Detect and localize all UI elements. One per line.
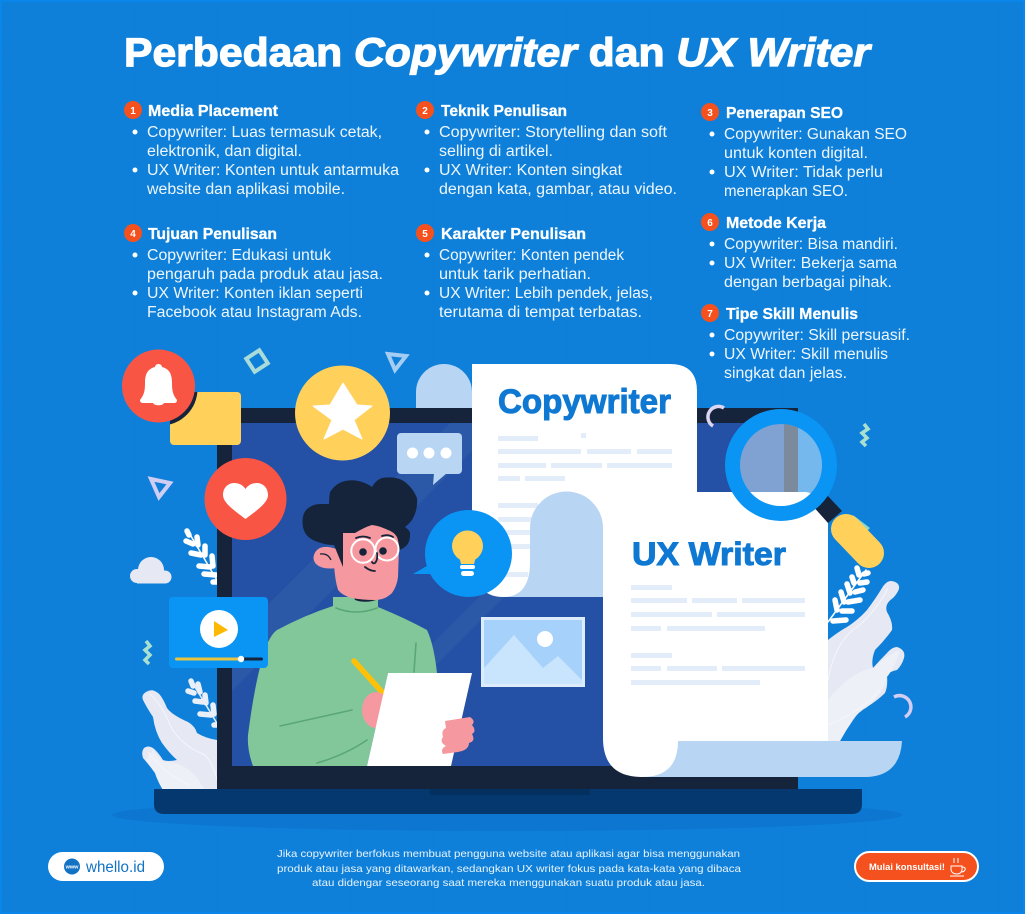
icon: cloud [130,557,172,584]
sweater [248,597,437,766]
paper heading: ux writer: UX Writer [632,536,786,572]
section 5: karakter penulisan: Karakter Penulisan [441,226,586,243]
paper heading: copywriter: Copywriter [498,383,671,421]
section 3: penerapan seo: UX Writer: Tidak perlu [724,164,883,181]
icon: video player [169,597,268,668]
section 2: teknik penulisan: dengan kata, gambar, atau video. [439,181,677,198]
section 1: media placement: elektronik, dan digital. [147,143,302,160]
section 1: media placement: UX Writer: Konten untuk antarmuka [147,162,399,179]
section 2: teknik penulisan: selling di artikel. [439,143,553,160]
decoration: zigzag left [145,641,150,664]
writing pad [367,673,472,766]
section 2: teknik penulisan: Teknik Penulisan [441,103,567,120]
section 5: karakter penulisan: untuk tarik perhatian. [439,266,591,283]
decoration: diamond [244,348,270,374]
footer text: Jika copywriter berfokus membuat pengguna website atau aplikasi agar bisa menggunakan [277,848,740,860]
section 2: teknik penulisan: 2 [422,106,428,117]
section 1: media placement: website dan aplikasi mobile. [146,181,345,198]
paper lines: ux writer [631,585,805,685]
logo pill: whello.id [85,859,145,876]
face [334,515,399,600]
section 6: metode kerja: Metode Kerja [726,215,826,232]
icon: heart [204,458,286,540]
logo pill [48,852,164,881]
paper roll: ux writer [503,492,603,597]
section 2: teknik penulisan: UX Writer: Konten singkat [439,162,623,179]
section 3: penerapan seo: Penerapan SEO [726,105,843,122]
section 7: tipe skill menulis: singkat dan jelas. [724,365,847,382]
title: Perbedaan Copywriter dan UX Writer [124,31,873,75]
footer text: atau didengar seseorang saat mereka menggunakan suatu produk atau jasa. [312,877,705,889]
section 3: penerapan seo: untuk konten digital. [724,145,868,162]
sweater folds [280,608,416,763]
footer text [277,848,741,889]
logo pill: www [65,864,79,870]
section 1: media placement: 1 [130,106,136,117]
icon: chat bubble [397,433,462,485]
section 1: media placement [124,101,399,198]
magnifying glass [725,409,870,553]
person [248,477,474,766]
glasses and features [351,535,398,571]
left hand [362,692,390,728]
pencil [354,661,382,692]
section 6: metode kerja: dengan berbagai pihak. [724,274,892,291]
section 5: karakter penulisan: UX Writer: Lebih pendek, jelas, [439,285,653,302]
section 6: metode kerja: UX Writer: Bekerja sama [724,255,897,272]
consultation button [855,852,978,881]
ear inner line [320,554,331,560]
consultation button: Mulai konsultasi! [869,862,945,873]
paper curl: ux writer [640,741,902,777]
section 6: metode kerja: 6 [707,218,713,229]
section 1: media placement: Media Placement [148,103,278,120]
section 4: tujuan penulisan: UX Writer: Konten iklan seperti [147,285,363,302]
section 4: tujuan penulisan: pengaruh pada produk atau jasa. [147,266,383,283]
section 6: metode kerja [701,213,898,291]
section 2: teknik penulisan [416,101,677,198]
laptop [154,789,862,814]
paper roll: copywriter [416,364,472,409]
leaf branch: lower left [188,681,218,725]
ear [314,547,337,568]
section 4: tujuan penulisan: Copywriter: Edukasi untuk [147,247,331,264]
paper: ux writer [603,492,828,777]
icon: lightbulb bubble [413,510,512,597]
decoration: blue triangle [388,354,406,370]
section 7: tipe skill menulis: 7 [707,309,713,320]
laptop screen [217,408,798,789]
section 3: penerapan seo [701,103,907,200]
section 3: penerapan seo: 3 [707,108,713,119]
decoration: arc top [708,406,724,426]
plant: right [828,581,904,741]
decoration: lavender triangle [151,479,170,497]
section 2: teknik penulisan: Copywriter: Storytelling dan soft [439,124,668,141]
leaf branch: upper left [186,531,218,582]
paper: copywriter [472,364,697,597]
section 4: tujuan penulisan: 4 [130,229,136,240]
neck shadow [353,595,379,602]
section 3: penerapan seo: menerapkan SEO. [724,183,848,200]
decoration: zigzag right [862,424,868,446]
plant: left [142,690,217,790]
hair [302,477,417,567]
image card [481,617,585,687]
section 7: tipe skill menulis: Copywriter: Skill persuasif. [724,327,910,344]
section 5: karakter penulisan: 5 [422,229,428,240]
leaf branch: right [828,568,868,622]
section 1: media placement: Copywriter: Luas termasuk cetak, [147,124,382,141]
laptop shadow [112,799,902,831]
icon: bell with yellow card [122,350,241,445]
right hand [442,717,474,754]
section 7: tipe skill menulis: UX Writer: Skill menulis [724,346,888,363]
paper lines: copywriter [498,433,672,577]
section 5: karakter penulisan: Copywriter: Konten pendek [439,247,624,264]
section 7: tipe skill menulis: Tipe Skill Menulis [726,306,858,323]
section 7: tipe skill menulis [701,304,910,382]
section 4: tujuan penulisan [124,224,383,321]
section 5: karakter penulisan: terutama di tempat terbatas. [439,304,642,321]
section 6: metode kerja: Copywriter: Bisa mandiri. [724,236,898,253]
section 5: karakter penulisan [416,224,653,321]
section 3: penerapan seo: Copywriter: Gunakan SEO [724,126,907,143]
decoration: arc right [894,696,911,717]
footer text: produk atau jasa yang ditawarkan, sedangkan UX writer fokus pada kata-kata yang dibaca [277,863,741,875]
icon: star [295,366,390,460]
section 4: tujuan penulisan: Facebook atau Instagram Ads. [147,304,362,321]
section 4: tujuan penulisan: Tujuan Penulisan [148,226,277,243]
